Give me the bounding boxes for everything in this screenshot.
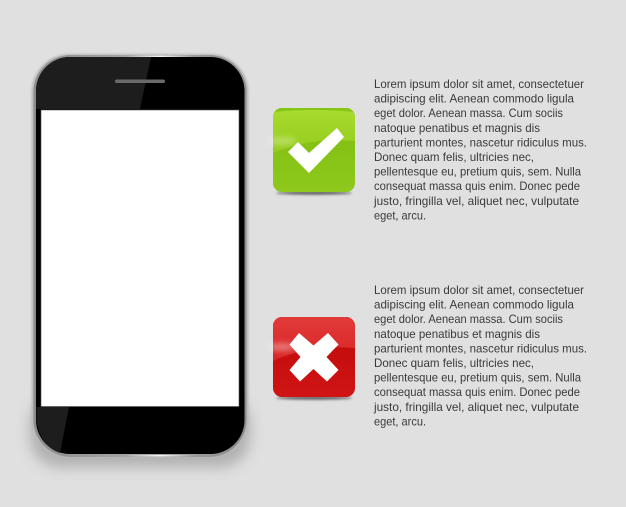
text block: bottom: Donec quam felis, ultricies nec, xyxy=(374,356,534,370)
text block: bottom: consequat massa quis enim. Donec pede xyxy=(374,385,580,399)
text block: top: pellentesque eu, pretium quis, sem. Nulla xyxy=(374,165,581,179)
phone shadow xyxy=(30,395,250,467)
icon: red cross button xyxy=(268,317,355,400)
button sheen xyxy=(268,343,296,351)
phone outer halo xyxy=(32,54,248,458)
text block: bottom: natoque penatibus et magnis dis xyxy=(374,327,540,341)
text block: bottom xyxy=(373,283,587,428)
button base xyxy=(273,108,355,192)
phone xyxy=(30,54,250,467)
text block: top: justo, fringilla vel, aliquet nec, vulputate xyxy=(373,194,579,208)
text block: bottom: adipiscing elit. Aenean commodo ligula xyxy=(374,298,574,312)
text block: top: Lorem ipsum dolor sit amet, consectetuer xyxy=(374,77,584,91)
text block: bottom: Lorem ipsum dolor sit amet, consectetuer xyxy=(374,283,584,297)
text block: top: natoque penatibus et magnis dis xyxy=(374,121,540,135)
rim highlight top xyxy=(125,56,195,57)
button sheen xyxy=(268,137,296,145)
cross mark xyxy=(290,333,338,382)
phone black body xyxy=(36,57,244,454)
button shadow xyxy=(276,396,352,400)
bottom gloss xyxy=(36,407,69,453)
text block: bottom: pellentesque eu, pretium quis, sem. Nulla xyxy=(374,371,581,385)
text block: top: eget, arcu. xyxy=(374,208,426,222)
screen xyxy=(41,110,239,406)
text block: bottom: justo, fringilla vel, aliquet nec, vulputate xyxy=(373,400,579,414)
button shadow xyxy=(276,191,352,195)
button gloss xyxy=(273,108,355,153)
text block: bottom: eget, arcu. xyxy=(374,414,426,428)
phone metal rim xyxy=(34,55,246,457)
text block: top: Donec quam felis, ultricies nec, xyxy=(374,150,534,164)
icon: green check button xyxy=(268,108,355,195)
button gloss xyxy=(273,317,355,361)
speaker xyxy=(115,80,165,83)
top gloss xyxy=(36,57,151,109)
button top edge xyxy=(273,108,355,112)
text block: bottom: parturient montes, nascetur ridiculus mus. xyxy=(374,341,587,355)
text block: top xyxy=(373,77,587,222)
rim highlight bottom xyxy=(125,455,195,456)
text block: top: parturient montes, nascetur ridiculus mus. xyxy=(374,135,587,149)
text block: top: eget dolor. Aenean massa. Cum sociis xyxy=(374,106,563,120)
text block: top: consequat massa quis enim. Donec pede xyxy=(374,179,580,193)
text block: top: adipiscing elit. Aenean commodo ligula xyxy=(374,92,574,106)
check mark xyxy=(288,128,344,173)
button base xyxy=(273,317,355,397)
text block: bottom: eget dolor. Aenean massa. Cum sociis xyxy=(374,312,563,326)
